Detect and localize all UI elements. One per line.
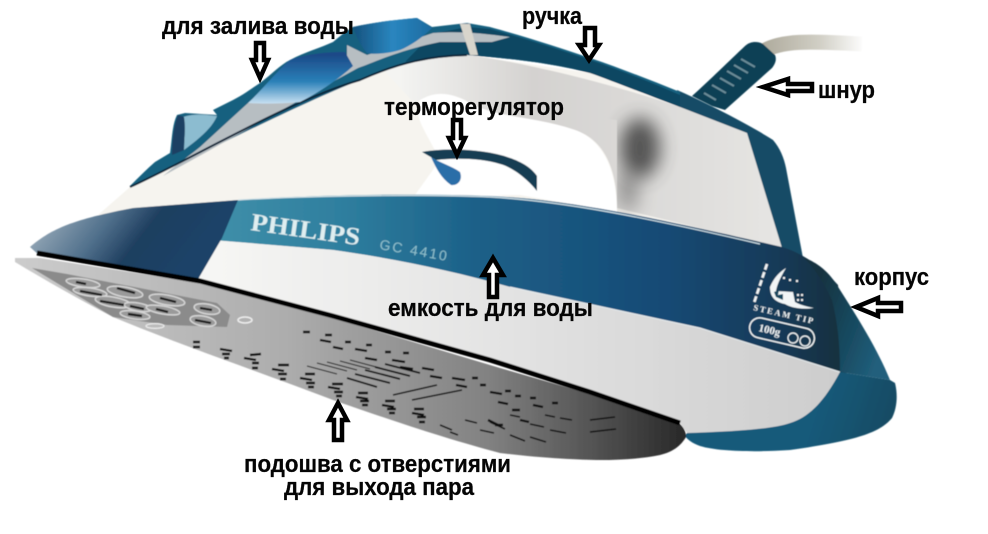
rear teal cap: [685, 372, 897, 451]
label: housing: корпус: [854, 264, 929, 291]
soleplate: [15, 258, 686, 460]
rear dark upper: [803, 257, 890, 380]
body: white upper shell: [98, 55, 782, 248]
label: water filler: для залива воды: [162, 13, 354, 40]
100g badge: [748, 316, 816, 350]
top shell: teal band: [130, 18, 680, 187]
arrow: soleplate: [329, 403, 347, 440]
label: water tank: емкость для воды: [388, 295, 593, 322]
arrow: housing: [856, 298, 901, 316]
soleplate black edge: [37, 253, 680, 423]
arrow: water tank: [483, 258, 503, 297]
handle grey body: [385, 55, 782, 247]
PHILIPS logo: PHILIPS: [249, 209, 362, 251]
soleplate steam holes: [193, 332, 616, 442]
cord strain relief: [692, 42, 776, 110]
rear hatch: [183, 115, 217, 150]
tank highlight line: [238, 196, 760, 244]
arrow: cord: [763, 79, 812, 95]
cord: [762, 42, 862, 52]
arrow: thermostat: [449, 120, 465, 155]
steam tip icon: STEAM TIP: [753, 302, 814, 326]
handle opening: [415, 94, 617, 212]
lower white shell: [197, 240, 840, 433]
water filler window: [248, 52, 353, 104]
label: soleplate: подошва с отверстиями: [244, 451, 511, 478]
rear teal strip: [677, 90, 803, 258]
dark seam line: [130, 55, 467, 187]
iron illustration: [15, 18, 897, 460]
soleplate front patch: [32, 268, 252, 328]
label: soleplate: для выхода пара: [284, 474, 475, 501]
arrow: water filler: [252, 43, 268, 78]
label: thermostat: терморегулятор: [384, 94, 564, 121]
rear hatch dark: [172, 115, 185, 155]
label: cord: шнур: [818, 77, 875, 104]
handle shadow: [618, 118, 660, 212]
tank-shell seam: [510, 287, 840, 372]
steam tank: [212, 195, 846, 375]
100g badge: 100g: [757, 322, 782, 339]
temperature dial ring: [422, 150, 537, 191]
grey strap on handle: [460, 24, 478, 55]
label: handle: ручка: [522, 3, 583, 30]
nose: dark front panel: [30, 200, 238, 281]
steam tip icon: [753, 264, 814, 326]
temperature dial knob: [431, 157, 461, 185]
top button: [353, 18, 432, 54]
label: soleplate: [244, 451, 511, 501]
arrow: handle: [579, 28, 599, 60]
top shell: grey panel: [163, 32, 510, 176]
model label: GC 4410: [378, 236, 448, 264]
top shell: dark handle band: [405, 27, 680, 107]
